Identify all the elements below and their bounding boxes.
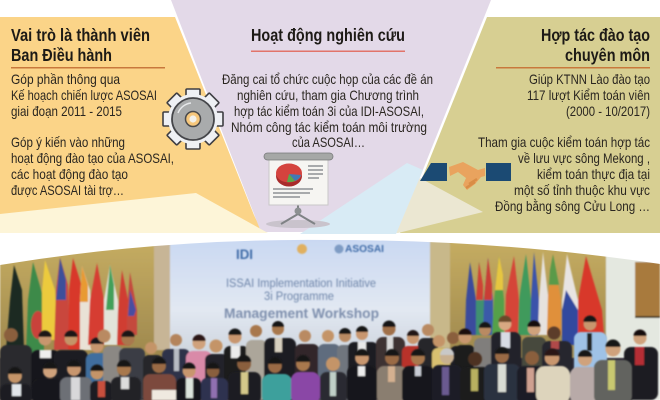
screen text: 3i Programme [264,291,334,303]
text block: centre panel: Nhóm công tác kiểm toán môi trường [231,119,427,135]
rule: right heading [496,67,650,68]
rule: left heading [11,67,165,68]
icon: presentation board [264,153,333,228]
text block: left panel: được ASOSAI tài trợ… [11,182,124,198]
screen text: Management Workshop [224,305,379,321]
text block: left panel: Góp ý kiến vào những [11,134,125,150]
text block: left panel [11,71,174,198]
screen text [224,244,384,321]
text block: centre panel: nghiên cứu, tham gia Chương trình [237,87,419,103]
panel: orange left [0,17,262,232]
panel: lilac centre [171,0,491,232]
heading: left panel [11,25,150,65]
heading: right panel [541,25,650,65]
text block: centre panel [222,71,433,150]
screen text: ISSAI Implementation Initiative [226,278,376,290]
text block: right panel [478,71,650,214]
text block: left panel: hoạt động đào tạo của ASOSAI, [11,150,174,166]
light beam: pale beige right [388,178,483,233]
photo: group portrait [0,235,660,400]
panel: olive right [400,17,660,233]
text block: centre panel: của ASOSAI… [292,134,365,150]
screen text: ASOSAI [345,244,384,255]
shadow band behind the people [0,358,632,400]
light beam: pale yellow left [0,193,268,233]
heading: centre panel: Hoạt động nghiên cứu [251,25,405,45]
people: front row [0,340,632,400]
text block: centre panel: hợp tác kiểm toán 3i của IDI-ASOSAI, [234,103,424,119]
heading: left panel: Ban Điều hành [11,45,112,65]
text block: centre panel: Đăng cai tổ chức cuộc họp của các đề án [222,71,433,87]
text block: left panel: các hoạt động đào tạo [11,166,128,182]
photo background curtains and screen [0,235,660,400]
icon: handshake [420,162,511,190]
text block: left panel: Kế hoạch chiến lược ASOSAI [11,87,157,103]
screen text: IDI [236,246,253,262]
flags left [6,258,137,355]
text block: left panel: Góp phần thông qua [11,71,120,87]
heading: left panel: Vai trò là thành viên [11,25,150,45]
light beam: pale blue [300,163,423,234]
text block: left panel: giai đoạn 2011 - 2015 [11,103,122,119]
rule: centre heading [251,50,405,52]
flags right [465,252,604,345]
people: back row [0,316,658,400]
icon: gear [163,89,223,149]
